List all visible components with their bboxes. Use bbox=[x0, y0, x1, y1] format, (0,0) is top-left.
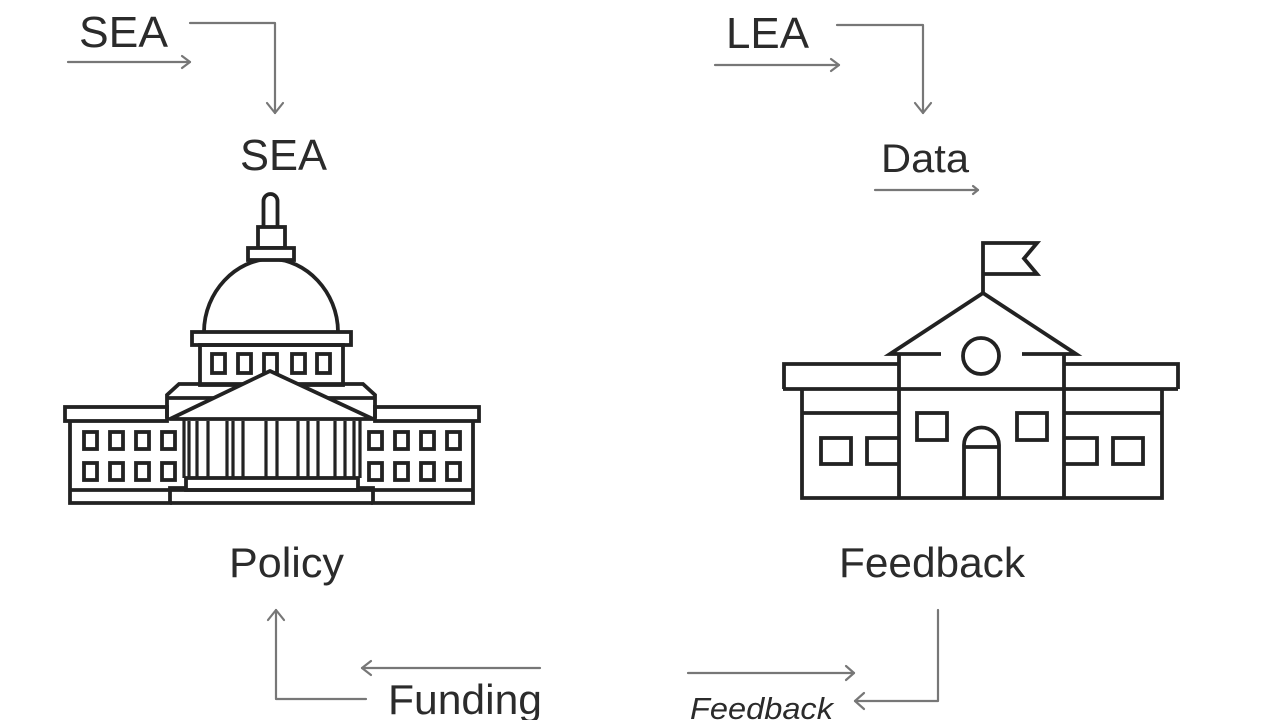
capitol drum windows bbox=[212, 354, 330, 373]
arrow: pointing left above Funding bbox=[362, 661, 540, 675]
school windows bbox=[821, 413, 1143, 464]
arrow: elbow up to Policy bbox=[268, 610, 366, 699]
arrow: under LEA pointing right bbox=[715, 59, 839, 71]
school cornices bbox=[784, 364, 1178, 389]
arrow: elbow from Feedback down and left bbox=[855, 610, 938, 709]
capitol dome, lantern and spire bbox=[192, 194, 351, 385]
heading: SEA: SEA bbox=[240, 131, 328, 180]
capitol wing cornices bbox=[65, 407, 479, 421]
arrow: top-right elbow down to Data bbox=[837, 25, 931, 113]
icon: school building bbox=[783, 243, 1178, 498]
school wings bbox=[802, 389, 1162, 498]
capitol pediment bbox=[170, 371, 373, 419]
arrow: under top-left SEA pointing right bbox=[68, 56, 190, 68]
caption: Policy: Policy bbox=[229, 539, 344, 586]
capitol wings bbox=[70, 421, 473, 503]
capitol columns bbox=[184, 419, 360, 478]
capitol left wing windows bbox=[84, 432, 175, 480]
capitol base and steps bbox=[170, 478, 373, 503]
school round window bbox=[963, 338, 999, 374]
school door bbox=[964, 428, 999, 498]
school roof bbox=[890, 293, 1076, 354]
school central block bbox=[783, 354, 1178, 498]
top-right label: LEA: LEA bbox=[726, 9, 810, 58]
school flag bbox=[983, 243, 1037, 293]
caption: Feedback: Feedback bbox=[839, 539, 1026, 586]
arrow: top-left elbow down to SEA bbox=[190, 23, 283, 113]
heading: Data: Data bbox=[881, 137, 970, 181]
top-left label: SEA: SEA bbox=[79, 8, 169, 57]
icon: capitol building bbox=[65, 194, 479, 503]
capitol right wing windows bbox=[369, 432, 460, 480]
capitol shoulders bbox=[167, 384, 375, 418]
arrow: under Data pointing right bbox=[875, 186, 978, 194]
arrow: pointing right above Feedback bbox=[688, 666, 854, 680]
